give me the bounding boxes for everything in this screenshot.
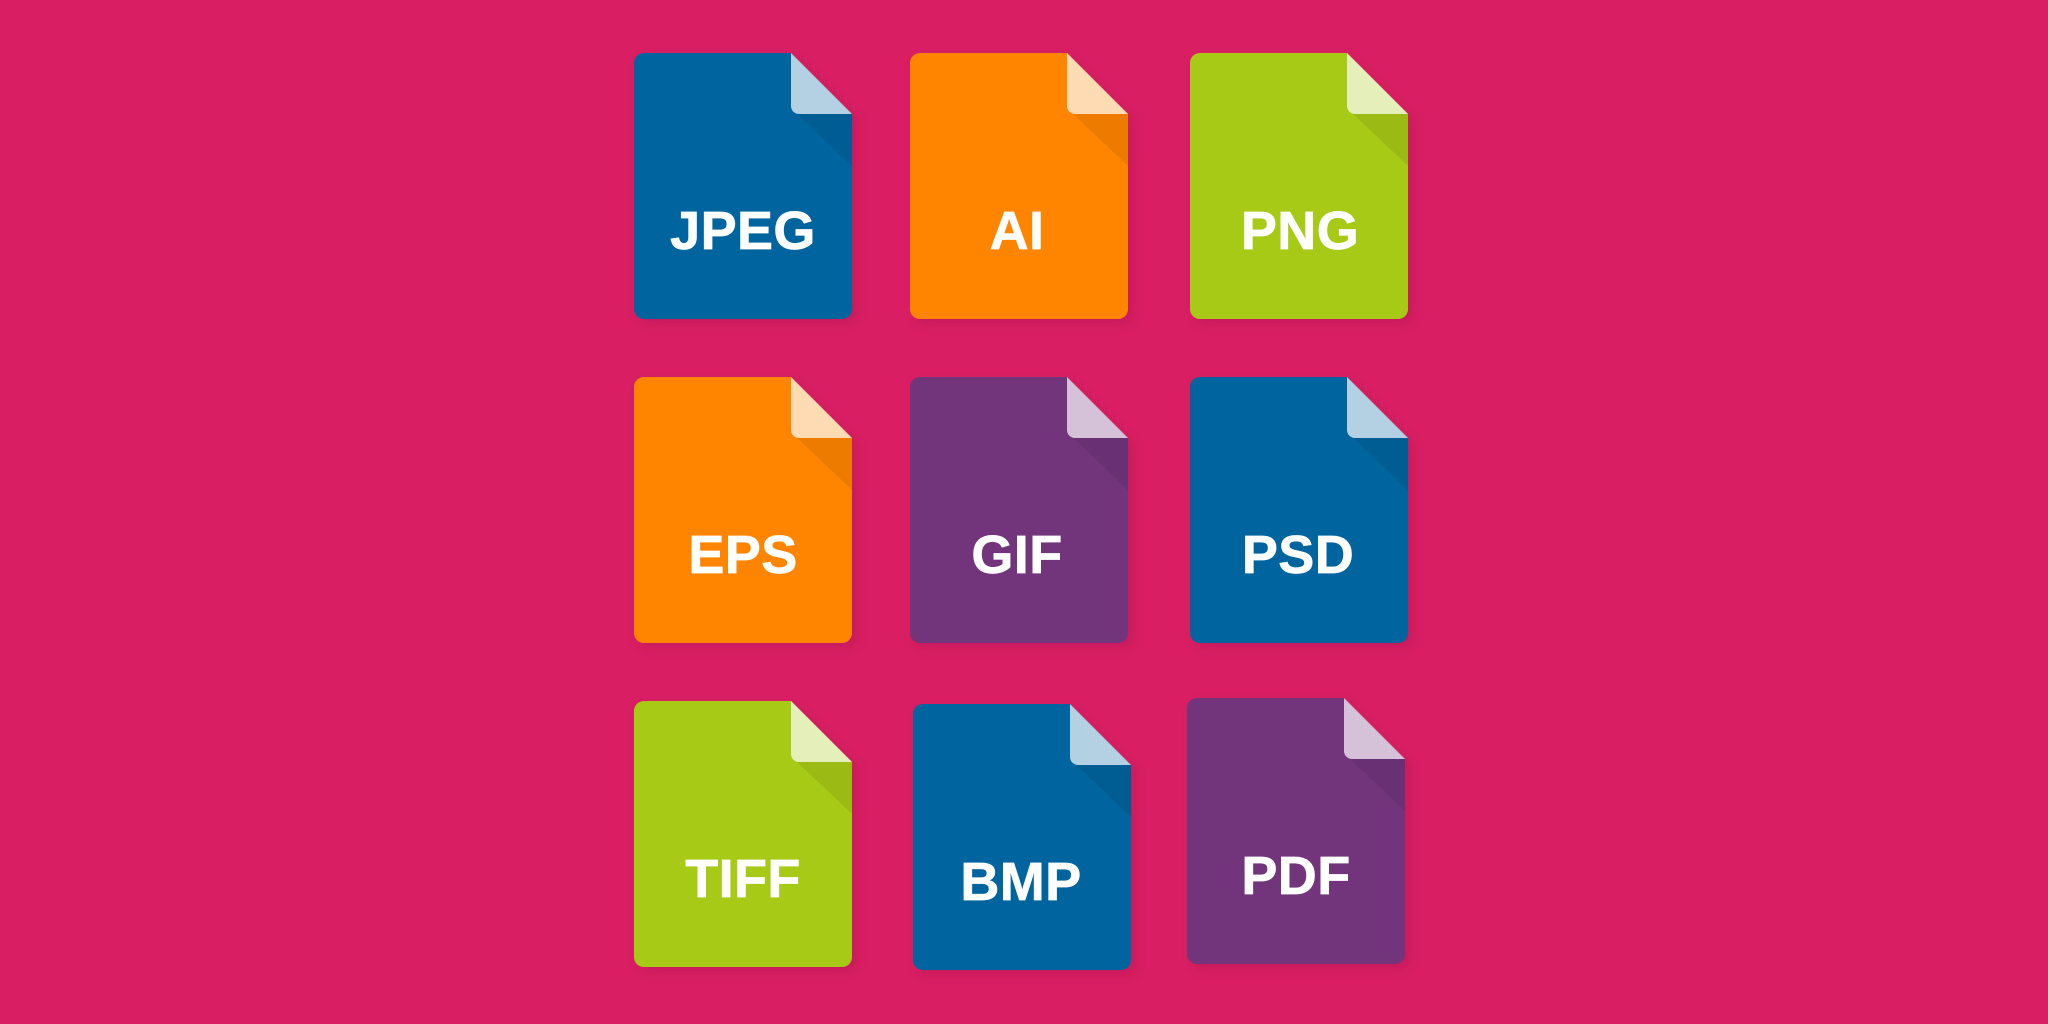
file icon: JPEG: JPEG [670, 201, 816, 261]
file icon: PSD: PSD [1242, 525, 1354, 585]
file icon: AI: AI [990, 201, 1044, 261]
file icon: PDF: PDF [1241, 846, 1351, 906]
file icon: JPEG [634, 53, 852, 319]
file icon: TIFF: TIFF [685, 849, 801, 909]
file icon: BMP: BMP [960, 852, 1082, 912]
file icon: PDF [1187, 698, 1405, 964]
file icon: PSD [1190, 377, 1408, 643]
file icon: TIFF [634, 701, 852, 967]
file icon: GIF [910, 377, 1128, 643]
file icon: PNG [1190, 53, 1408, 319]
file icon: GIF: GIF [971, 525, 1063, 585]
file icon: EPS [634, 377, 852, 643]
file icon: AI [910, 53, 1128, 319]
file icon: EPS: EPS [688, 525, 798, 585]
file icon: PNG: PNG [1241, 201, 1359, 261]
file icon: BMP [913, 704, 1131, 970]
